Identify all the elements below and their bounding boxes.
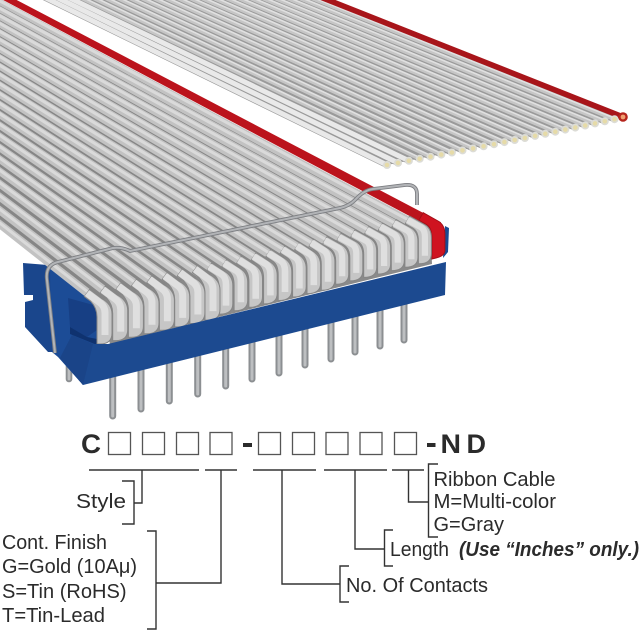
label: length: Length bbox=[390, 539, 449, 561]
wire retaining clip bbox=[47, 185, 417, 353]
label: style: Style bbox=[76, 490, 126, 513]
code dash and suffix bbox=[243, 429, 486, 459]
label: contact finish options: Cont. Finish bbox=[2, 532, 107, 554]
near ribbon cable top surface bbox=[0, 0, 441, 309]
part number code: C bbox=[81, 429, 101, 459]
label: contact finish options: G=Gold (10Aμ) bbox=[2, 556, 137, 578]
label: ribbon cable options bbox=[434, 468, 556, 536]
leader lines and brackets bbox=[89, 464, 438, 629]
tapered wire bodies bbox=[0, 0, 427, 308]
code dash and suffix: D bbox=[466, 429, 486, 459]
connector side block bbox=[50, 268, 100, 385]
folded wire ends at connector bbox=[84, 213, 445, 344]
back pin bbox=[66, 350, 72, 379]
label: ribbon cable options: Ribbon Cable bbox=[434, 468, 556, 491]
code dash and suffix: N bbox=[440, 429, 461, 459]
label: contact finish options bbox=[2, 532, 137, 627]
label: ribbon cable options: G=Gray bbox=[434, 513, 505, 536]
label: number of contacts: No. Of Contacts bbox=[346, 574, 488, 597]
near cable red stripe bbox=[0, 0, 441, 231]
far ribbon cable bbox=[0, 0, 628, 165]
connector rear plate bbox=[23, 226, 449, 352]
front pins bbox=[113, 290, 404, 416]
far cable red stripe bbox=[0, 0, 623, 117]
label: ribbon cable options: M=Multi-color bbox=[434, 490, 556, 513]
label: contact finish options: T=Tin-Lead bbox=[2, 605, 105, 627]
connector front bar bbox=[60, 262, 446, 385]
part number code bbox=[81, 429, 486, 459]
label: contact finish options: S=Tin (RoHS) bbox=[2, 581, 127, 603]
code boxes bbox=[108, 432, 416, 454]
